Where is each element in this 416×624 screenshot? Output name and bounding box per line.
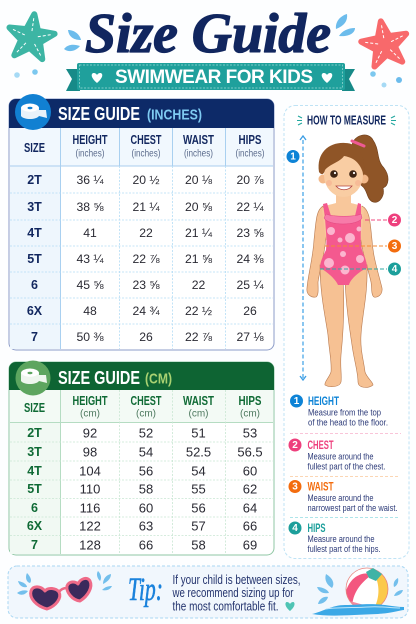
cm rows: 56 bbox=[191, 500, 206, 516]
inches rows: 3T bbox=[27, 200, 42, 214]
inches rows: 5T bbox=[27, 252, 42, 266]
tip text: we recommend sizing up for bbox=[172, 586, 294, 600]
cm column headers: (cm) bbox=[240, 408, 260, 420]
icon: water splashes left bbox=[14, 30, 81, 78]
cm column headers: (cm) bbox=[80, 408, 100, 420]
inches rows: 48 bbox=[83, 304, 97, 318]
inches column headers: CHEST bbox=[130, 133, 162, 147]
icon: waves bbox=[312, 604, 404, 616]
legend: waist: Measure around the bbox=[308, 493, 374, 504]
legend: height bbox=[290, 394, 388, 428]
cm column headers: HEIGHT bbox=[72, 394, 108, 408]
cm column headers: HIPS bbox=[238, 394, 262, 408]
cm column headers: (cm) bbox=[188, 408, 208, 420]
legend: chest: 2 bbox=[292, 440, 298, 451]
icon: green tape measure bbox=[16, 360, 50, 396]
cm rows: 63 bbox=[139, 518, 153, 534]
cm column headers: CHEST bbox=[130, 394, 162, 408]
inches rows: 22 ½ bbox=[185, 304, 212, 318]
panel: cm table bbox=[9, 360, 274, 555]
cm rows: 66 bbox=[243, 518, 257, 534]
legend: height: 1 bbox=[294, 396, 300, 407]
inches heading: (INCHES) bbox=[147, 106, 202, 124]
tip label: Tip: bbox=[128, 572, 163, 608]
ears bbox=[318, 174, 328, 184]
cm rows: 54 bbox=[139, 444, 153, 460]
inches rows: 22 bbox=[139, 226, 153, 240]
cm rows: 7 bbox=[31, 538, 38, 552]
cm rows: 52 bbox=[139, 426, 153, 440]
legend: chest: CHEST bbox=[308, 438, 334, 452]
legend: height: HEIGHT bbox=[308, 394, 339, 408]
icon: coral starfish bbox=[358, 17, 411, 68]
cm rows: 54 bbox=[191, 464, 206, 478]
inches rows: 22 ¼ bbox=[236, 200, 264, 214]
inches column headers: (inches) bbox=[184, 148, 213, 160]
badge 1 on arrow: 1 bbox=[290, 152, 296, 162]
chest marker: 2 bbox=[392, 215, 398, 226]
cm rows: 55 bbox=[191, 482, 206, 496]
cm rows: 116 bbox=[80, 500, 100, 516]
cm rows: 6X bbox=[27, 519, 43, 533]
legend: waist bbox=[288, 480, 398, 514]
waist marker bbox=[325, 240, 401, 252]
inches rows: 43 ¼ bbox=[76, 252, 104, 266]
ponytail bbox=[352, 135, 388, 202]
inches rows: 25 ¼ bbox=[236, 278, 264, 292]
inches rows: 4T bbox=[27, 226, 42, 240]
cm rows: 62 bbox=[243, 482, 257, 496]
waist marker: 3 bbox=[392, 241, 398, 252]
scrunchie bbox=[352, 141, 364, 146]
tip text bbox=[172, 573, 300, 614]
arrow: height bbox=[300, 136, 306, 380]
cm rows: 104 bbox=[79, 464, 101, 478]
inches rows: 21 ⅝ bbox=[185, 252, 213, 266]
inches rows: 22 bbox=[192, 278, 205, 292]
cm rows: 58 bbox=[139, 482, 153, 496]
cm rows: 58 bbox=[191, 538, 206, 552]
inches rows: 21 ¼ bbox=[132, 200, 160, 214]
legend: chest: Measure around the bbox=[308, 452, 374, 462]
inches rows: 27 ⅛ bbox=[236, 330, 264, 344]
inches rows: 20 ⅛ bbox=[185, 173, 213, 187]
legend: hips: 4 bbox=[292, 523, 298, 534]
inches rows bbox=[27, 173, 264, 344]
inches rows: 20 ⅞ bbox=[236, 173, 264, 187]
cm heading: SIZE GUIDE bbox=[58, 368, 140, 388]
icon: splashes by ball bbox=[317, 574, 403, 604]
icon: teal starfish bbox=[6, 11, 57, 60]
inches column headers: WAIST bbox=[183, 133, 214, 147]
inches rows: 45 ⅝ bbox=[76, 278, 104, 292]
cm rows: 64 bbox=[243, 500, 257, 516]
cm rows: 60 bbox=[243, 464, 257, 478]
icon: teal heart bbox=[285, 602, 295, 611]
inches rows: 38 ⅝ bbox=[76, 200, 104, 214]
swimsuit bbox=[320, 203, 367, 285]
arms bbox=[307, 206, 326, 297]
cm rows: 3T bbox=[27, 445, 42, 459]
inches rows: 24 ¾ bbox=[132, 304, 160, 318]
inches rows: 23 ⅝ bbox=[132, 278, 160, 292]
inches rows: 6 bbox=[31, 278, 38, 292]
cm rows: 66 bbox=[139, 538, 153, 552]
inches column headers: (inches) bbox=[236, 148, 264, 160]
cm rows: 56.5 bbox=[237, 444, 263, 460]
badge 1 on arrow bbox=[286, 150, 300, 163]
inches column headers: HIPS bbox=[238, 133, 262, 147]
cm rows: 4T bbox=[27, 464, 42, 478]
inches rows: 23 ⅝ bbox=[236, 226, 264, 240]
banner bbox=[66, 63, 355, 91]
inches column headers: (inches) bbox=[76, 148, 104, 160]
inches rows: 36 ¼ bbox=[76, 173, 104, 187]
cm column headers: WAIST bbox=[183, 394, 214, 408]
hips marker: 4 bbox=[392, 264, 398, 275]
legend: hips: HIPS bbox=[308, 521, 326, 535]
inches rows: 21 ¼ bbox=[185, 226, 213, 240]
inches column headers bbox=[24, 133, 264, 160]
cm rows: 110 bbox=[80, 482, 100, 496]
panel: how to measure bbox=[284, 106, 409, 558]
legend: waist: WAIST bbox=[308, 480, 334, 494]
cm rows: 56 bbox=[139, 464, 153, 478]
cm rows: 60 bbox=[139, 500, 153, 516]
title: Size Guide bbox=[85, 3, 331, 65]
inches heading: SIZE GUIDE bbox=[58, 104, 140, 124]
legend: hips: fullest part of the hips. bbox=[308, 544, 380, 555]
cm column headers: SIZE bbox=[24, 401, 45, 415]
cm rows: 122 bbox=[79, 518, 101, 534]
hair bbox=[319, 143, 364, 176]
illustration: girl in swimsuit bbox=[307, 135, 388, 387]
legend: waist: 3 bbox=[292, 482, 298, 492]
tip text: If your child is between sizes, bbox=[172, 573, 300, 587]
inches rows: 22 ⅞ bbox=[185, 330, 213, 344]
cm rows: 53 bbox=[243, 426, 257, 440]
tip text: the most comfortable fit. bbox=[172, 600, 278, 614]
panel: tip bbox=[8, 566, 408, 618]
cm column headers: (cm) bbox=[136, 408, 156, 420]
inches rows: 26 bbox=[243, 304, 257, 318]
icon: heart sunglasses bbox=[31, 578, 91, 609]
legend: height: Measure from the top bbox=[308, 408, 381, 418]
cm rows: 52.5 bbox=[186, 444, 211, 460]
cm rows: 69 bbox=[243, 538, 257, 552]
inches rows: 50 ⅜ bbox=[76, 330, 104, 344]
chest marker bbox=[365, 214, 401, 226]
legend: hips bbox=[288, 521, 380, 555]
inches rows: 41 bbox=[83, 226, 97, 240]
cm rows: 2T bbox=[27, 426, 42, 440]
inches rows: 20 ½ bbox=[132, 173, 160, 187]
cm rows: 57 bbox=[191, 518, 206, 534]
cm rows: 92 bbox=[83, 426, 97, 440]
legend: chest: fullest part of the chest. bbox=[308, 462, 386, 472]
cm rows: 128 bbox=[79, 538, 101, 552]
icon: beach ball bbox=[346, 568, 388, 605]
cm rows: 98 bbox=[83, 444, 97, 460]
hips marker bbox=[320, 262, 401, 276]
inches rows: 2T bbox=[27, 173, 42, 187]
inches rows: 20 ⅝ bbox=[185, 200, 213, 214]
panel: inches table bbox=[9, 94, 274, 350]
inches column headers: (inches) bbox=[132, 148, 160, 160]
cm heading: (CM) bbox=[145, 370, 172, 388]
banner text: SWIMWEAR FOR KIDS bbox=[115, 67, 313, 88]
icon: splashes by sunglasses bbox=[17, 571, 112, 595]
inches rows: 24 ⅜ bbox=[236, 252, 264, 266]
face bbox=[324, 153, 363, 197]
eyes and smile bbox=[326, 170, 361, 190]
legend: hips: Measure around the bbox=[308, 534, 374, 545]
inches rows: 22 ⅞ bbox=[132, 252, 160, 266]
cm rows: 5T bbox=[27, 482, 42, 496]
inches rows: 6X bbox=[27, 304, 43, 318]
inches column headers: SIZE bbox=[24, 141, 45, 155]
cm column headers bbox=[24, 394, 262, 420]
icon: water splashes right bbox=[336, 14, 402, 88]
legend: chest bbox=[288, 438, 386, 472]
inches column headers: HEIGHT bbox=[72, 133, 108, 147]
inches rows: 7 bbox=[31, 330, 38, 344]
torso and neck bbox=[322, 192, 364, 240]
cm rows bbox=[27, 426, 263, 552]
icon: blue tape measure bbox=[15, 94, 51, 130]
legs bbox=[320, 265, 344, 387]
cm rows: 51 bbox=[191, 426, 206, 440]
cm rows: 6 bbox=[31, 501, 38, 515]
legend: height: of the head to the floor. bbox=[308, 418, 388, 428]
inches rows: 26 bbox=[139, 330, 153, 344]
